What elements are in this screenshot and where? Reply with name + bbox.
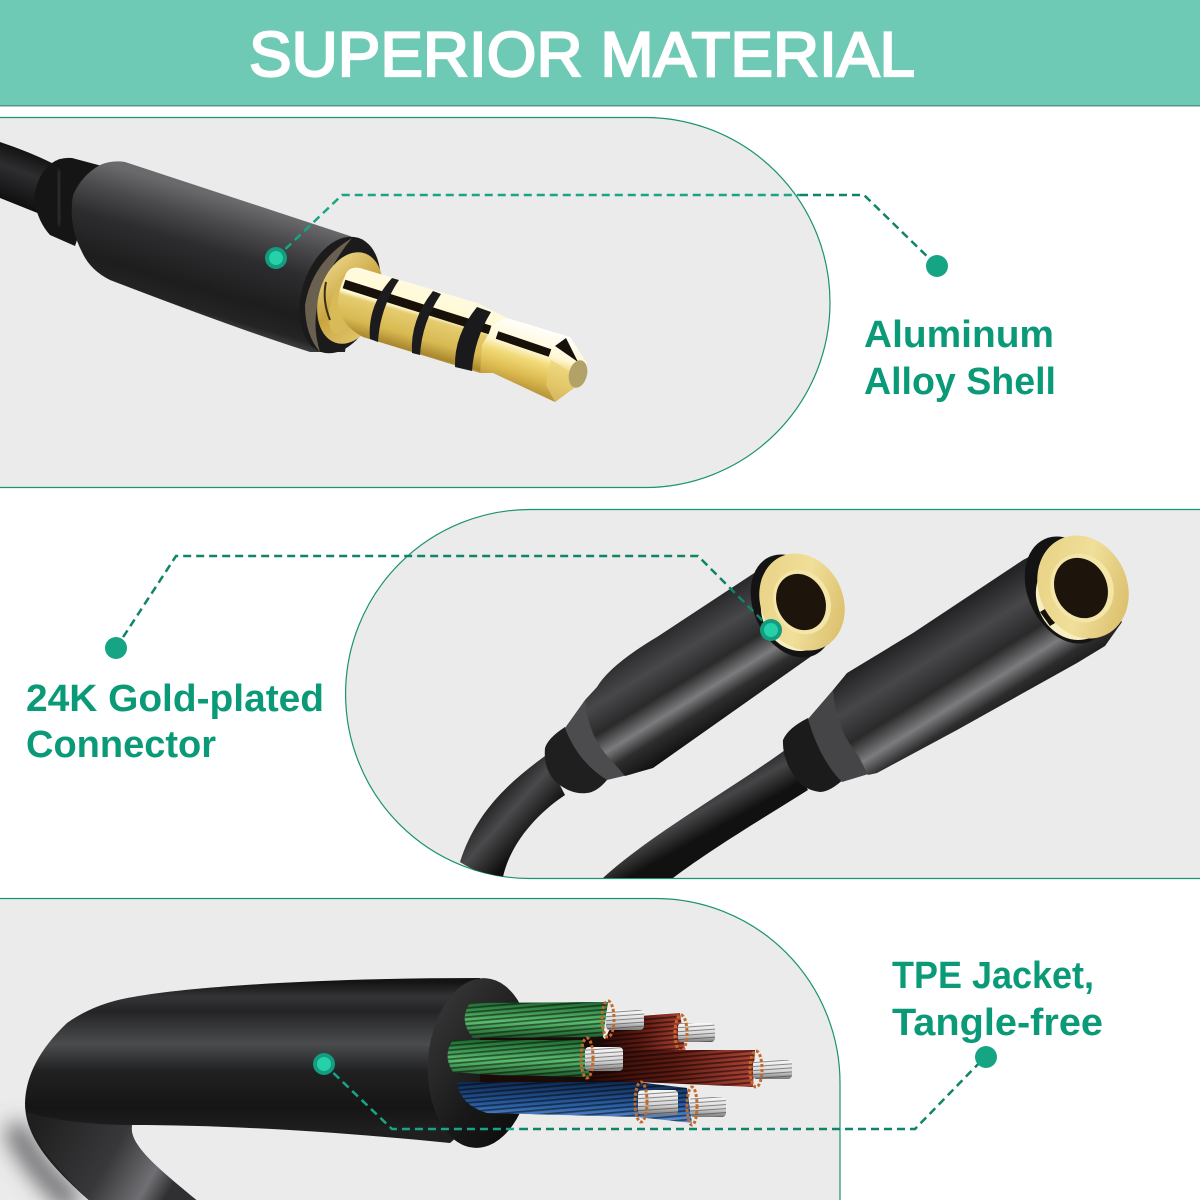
wire: blue [457, 1082, 726, 1125]
connector line: gold [116, 556, 771, 648]
label: gold-plated connector: Connector [26, 724, 216, 766]
connector line: shell [276, 195, 937, 266]
label: aluminum alloy shell: Aluminum [864, 314, 1054, 356]
jack left grey band [565, 700, 640, 780]
wire: green top [465, 1001, 644, 1038]
label: TPE jacket: Tangle-free [892, 1002, 1103, 1044]
plug: cable and strain relief [0, 142, 102, 246]
panel: aluminum alloy shell [0, 118, 1056, 488]
marker: shell [265, 247, 287, 269]
label: gold-plated connector [26, 678, 324, 766]
connector line: TPE [324, 1057, 985, 1129]
wire: green bottom [448, 1038, 623, 1078]
label: TPE jacket [892, 955, 1103, 1044]
title: SUPERIOR MATERIAL [249, 20, 915, 90]
header banner [0, 0, 1200, 106]
plug: gold tip [480, 318, 590, 402]
wire: red front [590, 1050, 792, 1087]
marker: gold label [105, 637, 127, 659]
jack right gold ring [1008, 520, 1145, 658]
jack left barrel [585, 558, 830, 776]
panel: gold-plated connector [26, 510, 1200, 878]
jack right grey band [808, 690, 885, 782]
wire core backing [480, 1032, 645, 1092]
label: gold-plated connector: 24K Gold-plated [26, 678, 324, 720]
plug: gold pin [338, 268, 507, 373]
panel: TPE jacket [0, 898, 1103, 1200]
jack right barrel [833, 542, 1122, 775]
jack right cable [603, 750, 808, 878]
jack left strain relief [545, 727, 607, 793]
marker: gold [760, 619, 782, 641]
label: aluminum alloy shell [864, 314, 1056, 403]
jack left gold ring [735, 539, 860, 671]
label: TPE jacket: TPE Jacket, [892, 955, 1094, 997]
jack left cable [460, 756, 565, 877]
wire: red rear [600, 1013, 715, 1051]
cable shadow [14, 1125, 75, 1200]
TPE cable body [25, 975, 538, 1200]
marker: TPE [313, 1053, 335, 1075]
marker: TPE label [975, 1046, 997, 1068]
jack right strain relief [783, 718, 845, 792]
plug: end face and gold collar [285, 226, 395, 364]
plug: aluminum barrel [72, 161, 360, 352]
label: aluminum alloy shell: Alloy Shell [864, 361, 1056, 403]
marker: shell label [926, 255, 948, 277]
